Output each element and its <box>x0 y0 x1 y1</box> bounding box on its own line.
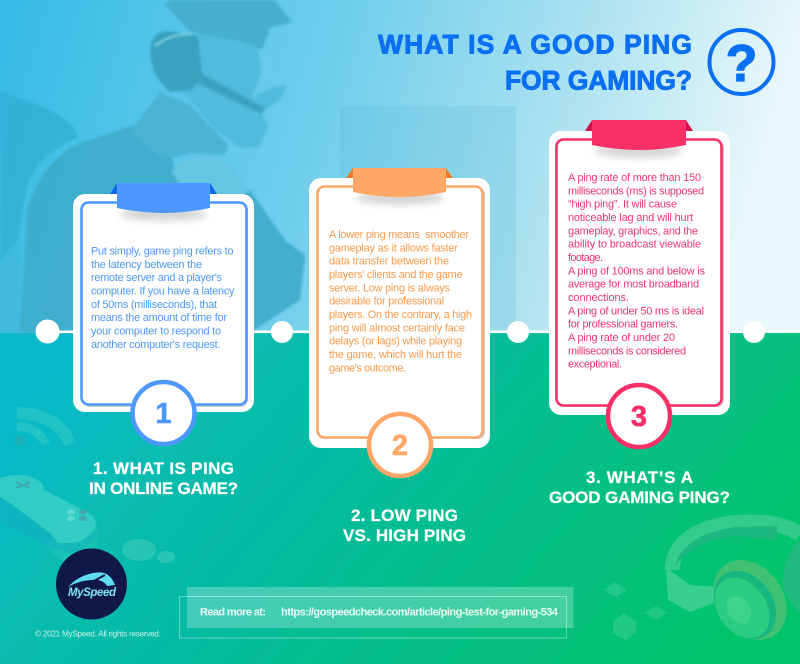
read more box <box>180 587 574 638</box>
ribbon <box>110 183 217 213</box>
logo: MySpeed: MySpeed <box>68 587 117 599</box>
heading: section 1 <box>89 459 238 498</box>
body text <box>329 229 472 374</box>
card frame <box>549 131 730 415</box>
read more box: https://gospeedcheck.com/article/ping-test-for-gaming-534 <box>281 606 559 618</box>
controller d-pad <box>16 482 30 488</box>
logo: MySpeed <box>56 548 127 620</box>
heading: section 3: GOOD GAMING PING? <box>549 488 730 507</box>
body text: players' clients and the game <box>329 269 462 281</box>
ribbon shadow <box>120 207 208 221</box>
number badge 2: 2 <box>392 430 408 462</box>
face <box>180 30 287 148</box>
icon: question mark circle <box>710 30 774 94</box>
copyright: © 2021 MySpeed. All rights reserved. <box>35 630 161 638</box>
body text: A ping rate of more than 150 <box>568 172 701 184</box>
ear cup ring <box>701 559 789 651</box>
far ear cup <box>783 540 800 612</box>
body text: average for most broadband <box>568 279 699 291</box>
heading: section 2: VS. HIGH PING <box>343 526 466 545</box>
decorative icon: cubes <box>604 582 667 640</box>
card frame <box>309 178 490 448</box>
heading: section 1: IN ONLINE GAME? <box>89 479 238 498</box>
body text: “high ping”. It will cause <box>568 199 677 211</box>
heading: section 3: 3. WHAT’S A <box>586 468 693 487</box>
chair <box>0 92 78 262</box>
body text: footage. <box>568 252 603 264</box>
body text: computer. If you have a latency <box>91 286 235 298</box>
heading: section 1: 1. WHAT IS PING <box>93 459 234 478</box>
icon: question mark circle: ? <box>726 35 757 93</box>
controller underside <box>0 497 102 553</box>
panel: card 1 <box>73 183 254 444</box>
body text: another computer's request. <box>91 339 220 351</box>
title <box>378 30 692 96</box>
body text: milliseconds (ms) is supposed <box>568 185 704 197</box>
ear cup pad <box>703 567 781 649</box>
decorative icon: headphones <box>666 522 800 654</box>
background: lower green area <box>0 333 800 664</box>
body text: milliseconds is considered <box>568 345 686 357</box>
torso and arm <box>20 118 305 333</box>
body text: of 50ms (milliseconds), that <box>91 299 217 311</box>
decorative icon: game controller <box>0 475 102 564</box>
body text: gameplay as it allows faster <box>329 242 458 254</box>
card frame <box>73 194 254 412</box>
body text: A ping of under 50 ms is ideal <box>568 305 704 317</box>
body text: desirable for professional <box>329 296 444 308</box>
body text: means the amount of time for <box>91 312 227 324</box>
face highlight <box>252 36 287 98</box>
body text: gameplay, graphics, and the <box>568 225 698 237</box>
body text: noticeable lag and will hurt <box>568 212 693 224</box>
ribbon shadow <box>595 144 683 158</box>
heading: section 2 <box>343 506 466 545</box>
body text: the game, which will hurt the <box>329 349 462 361</box>
panel: card 2 <box>309 168 490 476</box>
body text: data transfer between the <box>329 256 449 268</box>
body text <box>568 172 706 371</box>
connector line with bumps <box>36 320 800 344</box>
strut <box>666 565 730 612</box>
heading: section 3 <box>549 468 730 507</box>
headband <box>672 522 800 570</box>
ribbon <box>585 120 693 150</box>
body text: A lower ping means smoother <box>329 229 469 241</box>
body text: exceptional. <box>568 359 622 371</box>
photo: monitor behind gamer <box>340 106 516 333</box>
body text: remote server and a player's <box>91 272 223 284</box>
body text: ping will almost certainly face <box>329 322 465 334</box>
body text: A ping rate of under 20 <box>568 332 675 344</box>
number badge 2 <box>369 414 431 476</box>
neck and shoulder <box>130 92 228 160</box>
body text: the latency between the <box>91 259 202 271</box>
body text: ability to broadcast viewable <box>568 239 701 251</box>
body text: connections. <box>568 292 629 304</box>
title: FOR GAMING? <box>505 66 692 96</box>
body text: your computer to respond to <box>91 326 221 338</box>
number badge 1: 1 <box>155 398 172 430</box>
photo: gamer silhouette <box>0 0 305 333</box>
number badge 3: 3 <box>631 401 647 433</box>
body text: game's outcome. <box>329 362 406 374</box>
body text: server. Low ping is always <box>329 282 451 294</box>
background: upper sky-blue area <box>0 0 800 334</box>
body text: for professional gamers. <box>568 319 678 331</box>
body text <box>91 246 235 351</box>
body text: Put simply, game ping refers to <box>91 246 234 258</box>
lower-left glow <box>0 240 22 333</box>
hair <box>165 0 292 50</box>
body text: players. On the contrary, a high <box>329 309 472 321</box>
headset <box>150 31 202 92</box>
ear cup outer <box>698 546 800 654</box>
controller body <box>0 475 96 543</box>
number badge 3 <box>608 385 670 447</box>
decorative icon: gears <box>122 539 175 563</box>
ribbon shadow <box>356 191 444 205</box>
controller buttons <box>67 510 87 521</box>
body text: A ping of 100ms and below is <box>568 265 706 277</box>
title: WHAT IS A GOOD PING <box>378 30 692 60</box>
fist <box>172 155 248 205</box>
decorative icon: wifi <box>14 413 70 446</box>
ribbon <box>346 168 453 197</box>
read more box: Read more at: <box>200 606 266 618</box>
panel: card 3 <box>549 120 730 447</box>
controller shadow lobe <box>45 525 100 564</box>
body text: delays (or lags) while playing <box>329 336 462 348</box>
number badge 1 <box>132 382 194 444</box>
heading: section 2: 2. LOW PING <box>351 506 458 525</box>
